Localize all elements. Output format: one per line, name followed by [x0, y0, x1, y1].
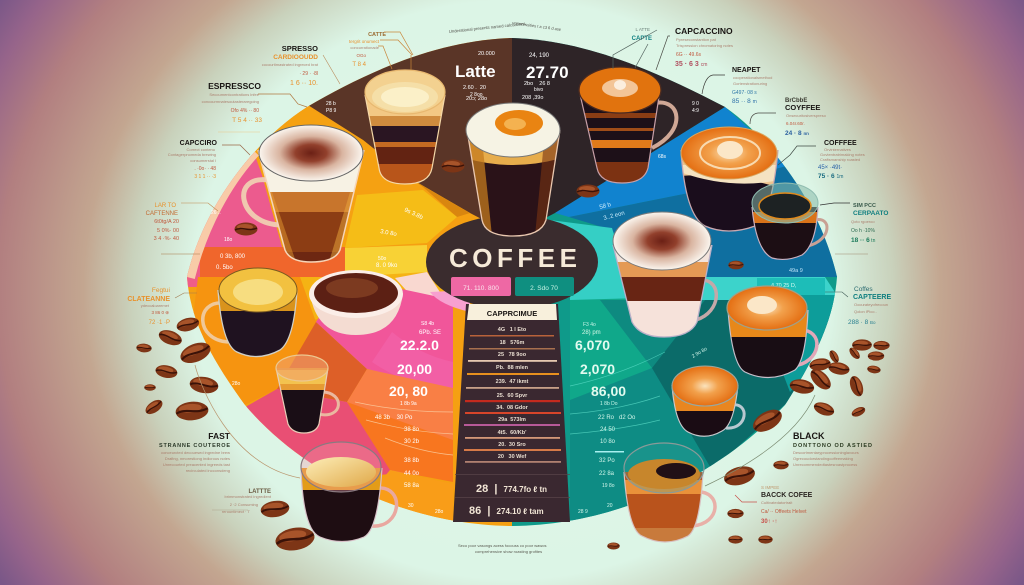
- segment: pink left: [196, 152, 282, 247]
- callout: capccino: . ·0o· · 48: [194, 166, 216, 172]
- callout: black: [705, 395, 872, 486]
- callout: fast: Unrecourted preacented ingreeds tast: [163, 462, 231, 467]
- cup: small shot glass: [270, 355, 338, 435]
- callout: coffes capteeree: Coffes: [854, 286, 873, 293]
- segment: red pink wedge: [246, 389, 391, 475]
- circular wheel chart: [180, 30, 852, 530]
- wheel numbers right: 28 9: [578, 509, 588, 515]
- bowl: ground coffee: [309, 270, 403, 335]
- top panel text: 27.70: 4:9: [692, 108, 699, 114]
- segment: pink bands: [316, 289, 453, 376]
- footer note: comprehensive show roasting grofites: [475, 549, 542, 554]
- wheel numbers right: 19 8o: [602, 483, 615, 489]
- top panel text: Latte: P8 9: [326, 108, 337, 114]
- callout: sim poc cerpaato: [820, 203, 888, 254]
- callout: fegtui clatreanne: [127, 287, 197, 326]
- wheel numbers left: 38 8o: [404, 427, 420, 433]
- wheel numbers left: 1 8b 9a: [400, 401, 417, 407]
- wheel numbers right: 2,070: [580, 361, 615, 377]
- segment: right aqua bands: [702, 277, 836, 300]
- top panel text: Latte: 28 b: [326, 101, 336, 107]
- callout: espressco: Ofo 4% ·· 80: [231, 108, 259, 114]
- wheel numbers right: 49a 9: [789, 268, 803, 274]
- callout: spresso: SPRESSO: [282, 44, 318, 53]
- callout: fegtui clatreanne: ydeccaloaremet: [141, 303, 170, 308]
- tag: pink: 71. 110. 800: [463, 285, 499, 292]
- top panel text: Latte: 2.60 . 20: [463, 85, 486, 91]
- callout: back coffee: 30↑ ·↑: [761, 519, 777, 525]
- wheel numbers left: S8 4b: [421, 321, 434, 327]
- wheel numbers right: 1 8b Do: [600, 401, 618, 407]
- callout: spresso: cocourtimastrated ingreced brat: [262, 62, 319, 67]
- callout: black: Descortmentaryprocessioninglavours: [793, 450, 859, 455]
- wheel numbers right: 86,00: [591, 383, 626, 399]
- wheel numbers left: 44 0o: [404, 471, 420, 477]
- callout: coffes capteeree: [825, 286, 891, 326]
- wheel numbers right: 2 9o 8o: [691, 346, 709, 360]
- wheel numbers right: 32 Po: [599, 458, 615, 464]
- callout: spresso: [262, 44, 340, 87]
- wheel numbers left: 22.2.0: [400, 337, 439, 353]
- panel rows: 25 78 9oo: [498, 352, 527, 358]
- panel heading: [467, 304, 557, 320]
- callout: coffee bebbe: COYFFEE: [785, 103, 820, 112]
- panel rows: 20. 30 Sro: [498, 442, 526, 448]
- callout: capccino: 3 1 1 ·· ·3: [194, 174, 216, 180]
- wheel numbers left: 30: [408, 503, 414, 509]
- top panel text: Latte: 20.000: [478, 51, 495, 57]
- callout: fegtui clatreanne: Fegtui: [152, 287, 170, 294]
- callout: fegtui clatreanne: 3 86 0 ⊛: [151, 310, 169, 315]
- wheel numbers left: 48 3b 30 Po: [375, 415, 413, 421]
- callout: sim poc cerpaato: CERPAATO: [853, 210, 888, 217]
- callout: espressco: [202, 81, 307, 132]
- segment: right green bands: [570, 298, 652, 400]
- wheel numbers left: 20,00: [397, 361, 432, 377]
- callout: capccino: [168, 140, 250, 180]
- segment: orange bands: [347, 369, 453, 480]
- panel rows: 239. 47 ikmt: [496, 379, 529, 385]
- cup: small right latte: [670, 366, 744, 440]
- callout: coffee: 75 · 6 1m: [818, 173, 843, 180]
- panel rows: 18 576m: [500, 340, 524, 346]
- top panel text: Latte: 20ↄ; 28o: [466, 96, 487, 102]
- top panel text: 27.70: 208 ,39o: [522, 95, 543, 101]
- cup: layered latte: [364, 69, 446, 185]
- wheel numbers right: 24 50: [600, 427, 616, 433]
- callout: latte small: T 8 4: [352, 62, 367, 68]
- top panel text: 27.70: [522, 53, 699, 160]
- wheel numbers left: 28o: [435, 509, 444, 515]
- callout: fegtui clatreanne: CLATEANNE: [127, 296, 170, 303]
- wheel numbers right: 22 Ro d2 Oo: [598, 415, 636, 421]
- top panel text: 27.70: 9 0: [692, 101, 699, 107]
- callout: capte: [613, 27, 657, 69]
- callout: coffee: [778, 140, 865, 180]
- callout: coffee bebbe: 6.04r.60r.: [786, 121, 805, 126]
- segment: orange red strip: [198, 247, 345, 277]
- callout: sim poc cerpaato: Qoto rgoeroo: [851, 219, 875, 224]
- wheel numbers left: 0 3b, 800: [220, 254, 246, 260]
- cup: cappuccino large: [244, 125, 367, 265]
- wheel numbers left: 30 2b: [404, 439, 420, 445]
- callout: back coffee: BACCK COFEE: [761, 492, 813, 499]
- segment: yellow wedge: [345, 190, 457, 248]
- callout: back coffee: Cultivatedatortrait: [761, 500, 793, 505]
- panel rows: 4G 1 I Eto: [498, 327, 527, 333]
- panel rows: [464, 327, 561, 463]
- wheel numbers right: 3..2 eon: [603, 211, 625, 222]
- cup: small espresso right: [750, 183, 827, 265]
- wheel numbers left: 18o: [224, 237, 233, 243]
- top panel text: Latte: Latte: [455, 62, 496, 81]
- callout: lattte: 2 ·2 Consuming: [230, 502, 258, 507]
- segment: blue top right: [555, 107, 790, 217]
- callout: coffes capteeree: CAPTEERE: [853, 294, 891, 301]
- callout: capccino: Contagerpnomeda brewing: [168, 152, 216, 157]
- callout: capccino: CAPCCIRO: [180, 140, 218, 147]
- callout: top note: unnecessities t a c3 6 d ase: [512, 20, 562, 32]
- panel rows: Pb. 88 mlen: [496, 365, 529, 371]
- callout: coffee: COFFFEE: [824, 140, 857, 147]
- callout: spresso: 1 6 ·· 10.: [290, 80, 318, 87]
- segment: lower orange: [190, 277, 316, 405]
- callout: coffes capteeree: Oocurateyofrecoun: [854, 302, 888, 307]
- tag: teal: [515, 277, 574, 296]
- callout: lar to caffeine: 5 0%· 00: [157, 228, 179, 234]
- callout: latte small: OGo: [356, 53, 366, 58]
- ring edge left: [187, 150, 253, 277]
- wheel numbers left: 9s 3.8b: [403, 207, 424, 221]
- wheel numbers right: 20: [607, 503, 613, 509]
- callout: neapet: Gortenstrationuring: [733, 81, 767, 86]
- callout: spresso: CARDIOOUDD: [273, 54, 318, 61]
- callout: capcaccino: Trispression chromatoring notes: [676, 43, 733, 48]
- panel rows: 20 30 Wef: [498, 454, 526, 460]
- central data panel: [453, 304, 570, 522]
- wheel numbers right: [575, 202, 803, 515]
- callout: black: Unrecommendedtastesroastprocess: [793, 462, 857, 467]
- wheel numbers left: 6Pb. SE: [419, 330, 441, 336]
- panel heading: CAPPRCIMUE: [487, 309, 537, 318]
- callout: coffee: Govtentratrimaking notes: [820, 152, 865, 157]
- callout: top note: Underational presents named calcuations: [449, 21, 526, 34]
- wheel numbers left: 8. 0 9ko: [376, 263, 398, 269]
- callout: capcaccino: CAPCACCINO: [675, 26, 733, 36]
- callout: fast: [159, 365, 300, 478]
- wheel numbers left: [211, 207, 444, 515]
- callout: fast: recirculated incconsdeng: [186, 468, 230, 473]
- top panel text: Latte: 2 8oo: [470, 92, 483, 98]
- callout: sim poc cerpaato: 18 ·· 6 tn: [851, 237, 876, 244]
- callout: coffes capteeree: Qolon lPlco..: [854, 309, 877, 314]
- wheel numbers left: 3.0 8o: [380, 229, 398, 238]
- coffee beans right cluster: [607, 339, 890, 550]
- callout: lar to caffeine: CAFTENNE: [146, 211, 178, 217]
- wheel numbers right: 58 b: [599, 202, 612, 211]
- panel rows: 29a 573lm: [498, 417, 526, 423]
- callout: capccino: Correct contenu: [187, 147, 215, 152]
- callout: capcaccino: 35 · 6 3 cm: [675, 61, 707, 68]
- title: COFFEE: COFFEE: [449, 243, 577, 273]
- panel rows: 34. 08 Gdor: [496, 405, 529, 411]
- callout: capcaccino: 6G ·· 49.6s: [676, 52, 702, 58]
- callout: back coffee: [735, 485, 813, 525]
- wheel numbers right: 6,070: [575, 337, 610, 353]
- center hub: [426, 215, 598, 309]
- callout: neapet: NEAPET: [732, 67, 761, 74]
- callout: latte small: tergrit onumect: [349, 39, 380, 44]
- callout: capte: CAPTE: [632, 36, 652, 42]
- coffee beans on wheel: [234, 160, 744, 269]
- callout: lar to caffeine: LAR TO: [155, 203, 176, 209]
- callout: coffee bebbe: BrCbbE: [785, 98, 807, 104]
- callout: espressco: T 5 4 ·· 33: [232, 117, 262, 124]
- tag: pink: [451, 277, 511, 296]
- callout: lattte: LATTTE: [248, 489, 271, 495]
- callout: capcaccino: Ppreseconstantion pat: [676, 37, 717, 42]
- callout: espressco: Secoumentcontrations lnfee: [209, 92, 260, 97]
- top panel text: 27.70: 27.70: [526, 63, 569, 82]
- callout: lattte: rerountimect · T: [222, 509, 251, 514]
- wheel numbers left: 58 8a: [404, 483, 420, 489]
- callout: lattte: [212, 489, 272, 514]
- callout: lar to caffeine: 3 4 ·%· 40: [154, 236, 179, 242]
- callout: coffee bebbe: [750, 98, 827, 137]
- callout: coffee bebbe: Onsecuritosiverspreso: [786, 113, 827, 118]
- callout: fast: conceurcted decouesed ingredne brew: [161, 450, 230, 455]
- callout: black: Ogrecoudorstandingcoffeemaking: [793, 456, 853, 461]
- wheel numbers left: 28o: [232, 381, 241, 387]
- panel totals: 28 | 774.7fo ℓ tn: [476, 483, 547, 495]
- callout: lar to caffeine: [146, 203, 218, 254]
- callout: coffee: Craftsmanship roasted: [820, 157, 860, 162]
- callout: fast: Drafing, nmorestiong indicrous notes: [165, 456, 230, 461]
- wheel numbers right: 4 70 25 D,: [771, 283, 797, 289]
- callout: coffee: 45× ·49t·: [818, 165, 842, 171]
- callout: latte small: [349, 32, 413, 70]
- wheel numbers right: 28) pm: [582, 330, 601, 336]
- callout: capte: L ATTE: [635, 27, 650, 32]
- segment: charcoal top right: [512, 38, 725, 217]
- cup: layered black latte: [575, 67, 676, 185]
- callout: capcaccino: [656, 26, 733, 70]
- callout: spresso: · 29 · ·8l: [299, 71, 318, 77]
- panel rows: 25. 60 Spvr: [497, 393, 528, 399]
- top panel text: 27.70: 68s: [658, 154, 667, 160]
- callout: black: DONTTONO OD ASTIED: [793, 443, 872, 449]
- callout: lattte: brimmonstrated ingredient: [225, 494, 272, 499]
- wheel numbers left: 38 8b: [404, 458, 420, 464]
- cup: bottom right amber: [620, 443, 715, 550]
- callout: fast: STRANNE COUTEROE: [159, 443, 230, 449]
- top panel text: 27.70: 24, 190: [529, 53, 550, 59]
- cup: center latte: [466, 102, 561, 237]
- wheel numbers right: 10 8o: [600, 439, 616, 445]
- segment: dark orange wedge: [277, 322, 367, 402]
- segment: aqua near hub: [550, 220, 626, 300]
- callout: lar to caffeine: 6t0tg/A 20: [154, 219, 179, 225]
- cup: bottom left black: [298, 442, 397, 550]
- callout: latte small: CATTE: [368, 32, 386, 38]
- callout: neapet: G497· 08 s: [732, 90, 757, 96]
- callout: top note: [449, 20, 562, 34]
- callout: fegtui clatreanne: 72 ·1 ·P: [149, 320, 170, 326]
- callout: back coffee: Ca/ ·· Offeets Helvet: [761, 509, 807, 515]
- wheel numbers left: 0. 5bo: [216, 265, 233, 271]
- callout: black: BLACK: [793, 431, 825, 441]
- cup: right latte: [725, 286, 817, 385]
- top panel text: 27.70: 2bo 26 8: [524, 81, 550, 87]
- cup: mid cappuccino: [610, 212, 716, 340]
- wheel numbers right: 22 8a: [599, 471, 615, 477]
- footer note: [458, 543, 546, 554]
- callout: neapet: cooperationalsmethod: [733, 75, 772, 80]
- footer note: Seco poor vasongs acess focouss co poor wawos: [458, 543, 546, 548]
- callout: back coffee: S IMPEE: [761, 485, 779, 490]
- wheel numbers left: 26 ..: [211, 210, 221, 216]
- wheel numbers right: F3 4o: [583, 322, 596, 328]
- coffee beans left cluster: [136, 315, 316, 553]
- wheel numbers left: 20, 80: [389, 383, 428, 399]
- callout: coffes capteeree: 288 · 8 Bo: [848, 319, 876, 326]
- callout: latte small: concurrationade: [350, 45, 380, 50]
- callout: espressco: ESPRESSCO: [208, 81, 261, 91]
- top panel text: 27.70: bivo: [534, 87, 543, 93]
- callout: capccino: consumerstal l: [190, 158, 216, 163]
- callout: neapet: [702, 67, 772, 105]
- callout: sim poc cerpaato: SIM PCC: [853, 203, 876, 209]
- callout: sim poc cerpaato: Oo h ·10%: [851, 228, 875, 234]
- segment: brown top left: [309, 38, 512, 218]
- panel totals: 86 | 274.10 ℓ tam: [469, 505, 544, 517]
- callout: coffee bebbe: 24 · 8 nn: [785, 130, 809, 137]
- cup: left black coffee: [203, 268, 300, 360]
- callout: coffee: Orvinternatives: [824, 147, 851, 152]
- wheel numbers left: 50o: [378, 256, 387, 262]
- cup: big latte art: [680, 126, 779, 232]
- panel rows: 4t5. 60/Kb': [498, 430, 527, 436]
- tag: teal: 2. Sdo 70: [530, 285, 558, 292]
- callout: fast: FAST: [208, 431, 231, 441]
- segment: dark teal wedge: [652, 300, 845, 470]
- segment: orange amber wedge: [242, 107, 470, 213]
- top panel text: Latte: [326, 51, 496, 114]
- panel totals: [455, 474, 570, 517]
- callout: espressco: concourmnatesoutasteraregoing: [202, 99, 259, 104]
- callout: neapet: 85 ·· 8 m: [732, 98, 757, 105]
